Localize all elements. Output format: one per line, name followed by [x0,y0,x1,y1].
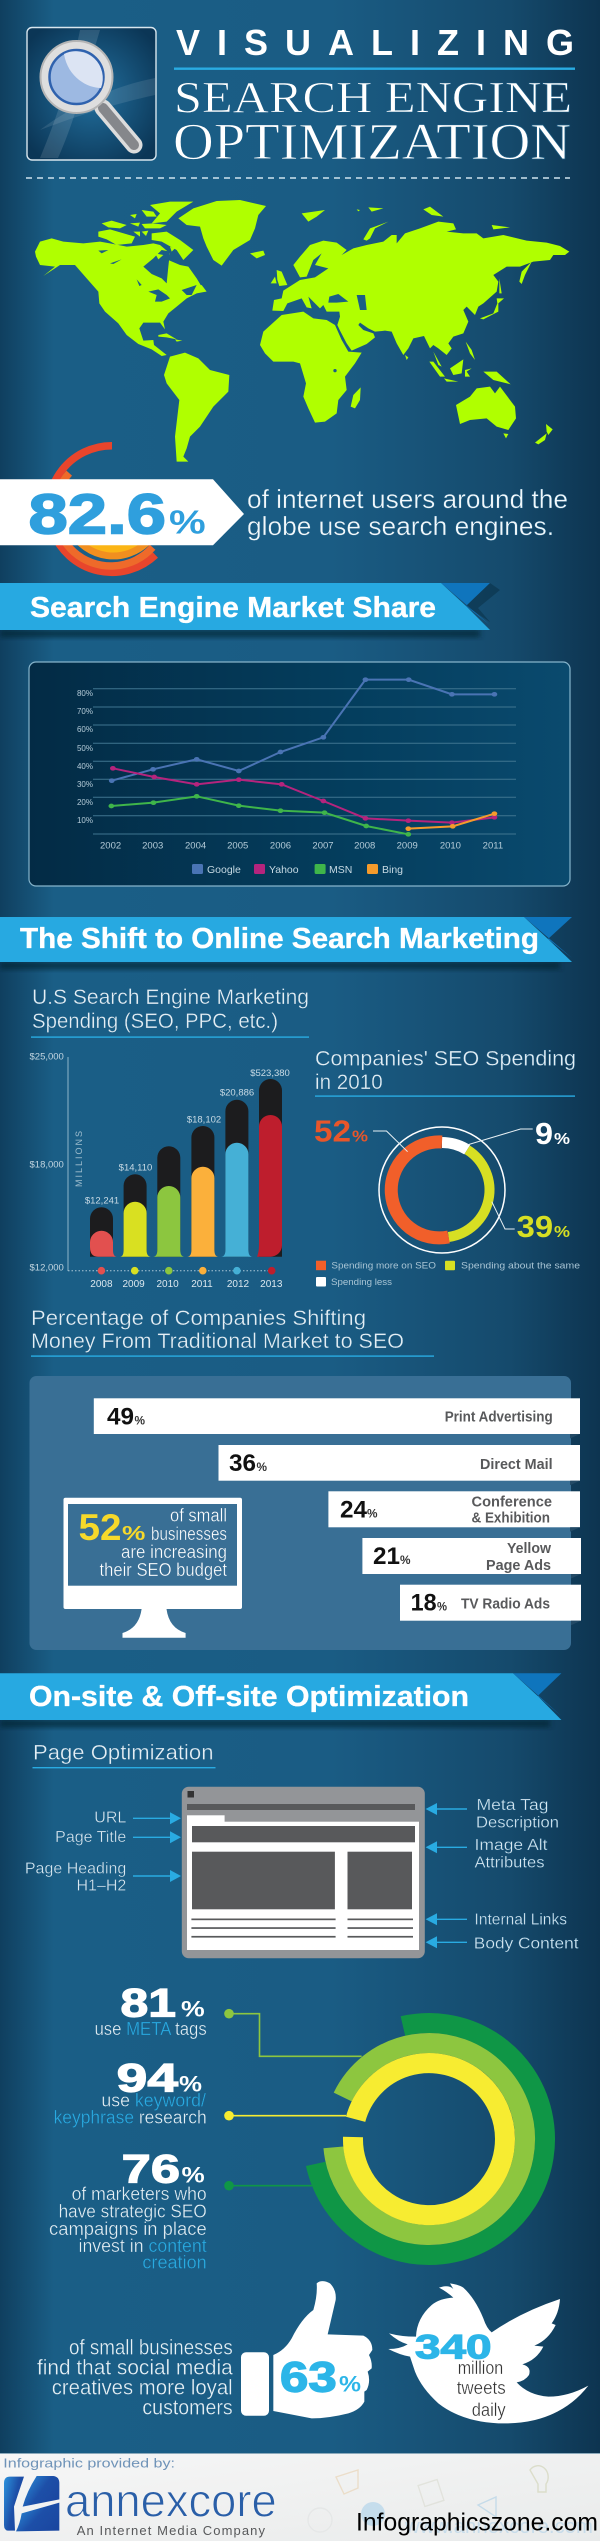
heading: US spending: U.S Search Engine Marketing [32,986,309,1009]
bar: tv radio ads [400,1585,581,1625]
diagram labels: left: Page Heading [25,1860,126,1877]
ribbon: the shift to online search marketing: The Shift to Online Search Marketing [20,923,539,955]
donut value 39: 39 [517,1209,553,1244]
chart x axis labels: 2005 [227,840,248,852]
text: social media creatives: creatives more loyal [52,2376,233,2399]
bar: conference and exhibition: % [367,1507,378,1521]
line: bing [405,811,497,831]
stat: 76 percent: invest in content [78,2236,207,2256]
bar year labels: 2010 [156,1279,179,1290]
bar value labels: $20,886 [220,1088,254,1098]
ribbon: search engine market share [0,583,500,637]
bar: conference and exhibition: 24 [340,1497,368,1524]
chart legend: MSN [329,864,352,876]
bar: direct mail [218,1445,580,1485]
donut value 52: 52 [314,1114,351,1149]
diagram labels: right: Body Content [474,1936,579,1953]
bar value labels [85,1068,290,1206]
dark bar backs [90,1079,282,1257]
donut value 39: % [554,1224,570,1241]
heading: page optimization: Page Optimization [33,1741,214,1764]
panel: market share line chart [29,662,570,886]
heading: percentage of companies shifting: Money From Traditional Market to SEO [31,1330,404,1353]
bar: direct mail: Direct Mail [480,1457,553,1473]
white arrow banner [0,479,244,545]
bar year labels: 2013 [260,1279,283,1290]
monitor: 52 percent of small businesses: 52 [78,1507,122,1548]
bar: conference and exhibition: & Exhibition [472,1511,550,1527]
bar year labels: 2009 [122,1279,145,1290]
chart x axis labels [100,840,503,852]
donut chart: SEO spending [314,1114,580,1288]
monitor: 52 percent of small businesses: their SEO budget [100,1560,227,1580]
icon: thumbs up with 63 percent: 63 [280,2354,337,2402]
ribbon: the shift to online search marketing [0,917,572,969]
chart x axis labels: 2003 [142,840,163,852]
stat: 94 percent: 94 [117,2057,179,2101]
bar year labels [90,1279,283,1290]
chart y axis labels: 10% [77,816,93,825]
diagram labels: right [474,1797,579,1953]
monitor: 52 percent of small businesses [64,1498,242,1638]
stat: 76 percent [49,2148,207,2272]
chart x axis labels: 2006 [270,840,291,852]
chart y axis labels: 80% [77,689,93,698]
donut value 9: 9 [535,1116,553,1151]
chart y axis labels: 20% [77,798,93,807]
bar value labels: $18,102 [187,1114,221,1126]
heading: percentage of companies shifting: Percentage of Companies Shifting [31,1307,366,1330]
world map [35,200,569,462]
heading: percentage of companies shifting [31,1307,434,1357]
diagram labels: right: Image Alt [474,1837,548,1854]
bar: print advertising [94,1398,580,1438]
decorative orange rings [49,446,155,572]
diagram: browser page [182,1787,425,1958]
stat: 82.6 percent [0,446,568,572]
stat: 81 percent [94,1982,207,2039]
diagram arrows: right [426,1803,467,1948]
footer faint icons [308,2466,548,2532]
diagram arrows: left [133,1812,181,1882]
bar value labels: $14,110 [119,1162,152,1174]
bar: print advertising: 49 [107,1403,134,1430]
monitor: 52 percent of small businesses: of small [170,1506,227,1526]
bar: tv radio ads: % [437,1600,447,1614]
text: social media creatives [37,2336,233,2419]
footer credit: Infographic provided by: [3,2455,175,2470]
heading: US spending: Spending (SEO, PPC, etc.) [32,1010,278,1033]
stat number: 82.6 [28,482,166,546]
map: europe asia africa australia [250,207,569,444]
stat: 81 percent: % [181,1997,205,2022]
chart y axis labels: 50% [77,744,93,753]
title: search engine: SEARCH ENGINE [174,73,572,122]
stat: 76 percent: % [182,2163,205,2188]
stat: 76 percent: have strategic SEO [59,2201,207,2221]
monitor: 52 percent of small businesses: are increasing [121,1542,227,1562]
donut value 9: % [554,1131,570,1148]
line: google [109,677,497,783]
chart x axis labels: 2007 [312,840,334,852]
chart y axis labels: 40% [77,762,93,771]
chart gridlines [93,689,516,834]
donut legend: Spending more on SEO [331,1260,436,1272]
diagram labels: left: URL [94,1810,126,1827]
header: icon and title [27,22,575,171]
heading: US spending [31,986,309,1038]
diagram labels: right: Description [476,1814,559,1831]
bar: print advertising: Print Advertising [445,1410,553,1426]
bar value labels: $12,241 [85,1196,119,1206]
chart x axis labels: 2011 [483,840,503,852]
icon: twitter bird with 340 million tweets daily: 340 [415,2328,492,2366]
watermark: Infographicszone.com [356,2509,598,2537]
stat: 76 percent: of marketers who [72,2184,207,2204]
donut value 52 [314,1114,368,1149]
icon: twitter bird with 340 million tweets daily: tweets [457,2378,506,2398]
chart lines [108,677,497,837]
faint website: www.annexcore.com [404,2516,593,2538]
icon: twitter bird with 340 million tweets daily: daily [472,2400,506,2420]
stat: 76 percent: creation [142,2252,207,2272]
coloured bars [90,1231,117,1257]
diagram labels: left: H1–H2 [76,1878,126,1895]
line: yahoo [110,766,497,825]
bar: tv radio ads: 18 [411,1590,437,1617]
donut value 52: % [352,1129,368,1146]
stat: 94 percent: use keyword/ [101,2091,206,2111]
donut value 9 [535,1116,570,1151]
stat caption [247,484,568,541]
diagram labels: right: Attributes [474,1854,544,1871]
donut legend: Spending less [331,1277,392,1288]
bar: yellow page ads: 21 [373,1543,400,1570]
bar chart axis labels: $18,000 [30,1160,64,1170]
stat: 76 percent: campaigns in place [49,2219,207,2239]
bar: direct mail: % [256,1460,267,1474]
diagram labels: right: Internal Links [474,1911,567,1928]
map: americas and greenland [35,200,266,462]
bar year dots [98,1267,276,1274]
donut segments [391,1142,489,1238]
bar: direct mail: 36 [229,1450,256,1477]
logo wordmark: annexcore [65,2475,277,2527]
logo mark [4,2476,59,2531]
chart x axis labels: 2008 [354,840,375,852]
donut legend [316,1260,580,1288]
chart x axis labels: 2004 [185,840,206,852]
bar: tv radio ads: TV Radio Ads [461,1596,550,1612]
bar value labels: $523,380 [250,1068,290,1079]
bar: yellow page ads: % [400,1553,411,1567]
donut leader lines [373,1129,533,1229]
donut legend: Spending about the same [461,1260,580,1272]
heading: companies SEO spending [315,1048,576,1097]
ribbon: on-site and off-site optimization: On-site & Off-site Optimization [29,1681,469,1713]
icon: magnifying glass [27,28,156,160]
footer [0,2453,600,2541]
bar chart axis labels: $25,000 [30,1052,64,1062]
chart legend: Google [207,864,241,876]
chart legend [192,864,403,876]
stat: 94 percent: % [179,2072,202,2097]
stat: 94 percent [54,2057,207,2127]
bar: conference and exhibition: Conference [472,1495,552,1511]
bar year labels: 2008 [90,1279,113,1290]
chart legend: Bing [382,864,403,876]
bar chart: US spending [30,1052,290,1290]
stat: 94 percent: keyphrase research [54,2107,207,2127]
text: social media creatives: of small businesses [69,2336,233,2359]
text: social media creatives: find that social media [37,2356,233,2379]
title: visualizing: VISUALIZING [176,22,574,63]
bar: yellow page ads [362,1538,581,1578]
connector: 81 percent [224,2009,362,2056]
monitor: 52 percent of small businesses: % [122,1523,146,1545]
bar chart: US spending: MILLIONS [74,1129,84,1187]
stat: 81 percent: use META tags [94,2019,207,2039]
chart y axis labels [77,689,93,825]
stat caption: globe use search engines. [247,511,554,541]
icon: thumbs up with 63 percent [241,2281,372,2418]
stat: 76 percent: 76 [122,2148,180,2192]
connector: 76 percent [224,2181,312,2190]
stat percent sign: % [169,504,206,540]
heading: companies SEO spending: in 2010 [315,1071,383,1094]
chart x axis labels: 2010 [440,840,461,852]
text: social media creatives: customers [142,2396,233,2419]
ribbon: on-site and off-site optimization [0,1673,561,1727]
panel: traditional market shift [30,1376,581,1650]
radial chart: green rings [316,2023,545,2255]
logo tagline: An Internet Media Company [77,2523,266,2538]
title: optimization: OPTIMIZATION [173,114,571,171]
bar chart axis labels [30,1052,64,1274]
chart legend: Yahoo [269,864,299,876]
connector: 94 percent [224,2111,346,2120]
stat: 81 percent: 81 [120,1982,176,2026]
heading: companies SEO spending: Companies' SEO Spending [315,1048,576,1071]
chart y axis labels: 70% [77,707,93,716]
bar year labels: 2011 [191,1279,213,1290]
bar: yellow page ads: Page Ads [486,1558,551,1574]
stat caption: of internet users around the [247,484,568,514]
icon: thumbs up with 63 percent: % [339,2372,361,2397]
chart x axis labels: 2002 [100,840,121,852]
monitor: 52 percent of small businesses: businesses [151,1524,227,1544]
line: msn [108,794,411,837]
bar year labels: 2012 [227,1279,250,1290]
icon: twitter bird with 340 million tweets daily [388,2283,588,2423]
diagram labels: right: Meta Tag [476,1797,548,1814]
ribbon: search engine market share: Search Engine Market Share [30,592,436,624]
chart y axis labels: 30% [77,780,93,789]
bar: print advertising: % [134,1413,145,1427]
chart y axis labels: 60% [77,725,93,734]
diagram labels: left [25,1810,126,1895]
chart x axis labels: 2009 [397,840,418,852]
title rule [174,68,575,70]
bar: yellow page ads: Yellow [507,1541,552,1557]
donut value 39 [517,1209,570,1244]
diagram labels: left: Page Title [55,1829,126,1846]
bar: conference and exhibition [328,1491,580,1532]
icon: twitter bird with 340 million tweets daily: million [458,2358,503,2378]
bar chart axis labels: $12,000 [30,1262,64,1274]
